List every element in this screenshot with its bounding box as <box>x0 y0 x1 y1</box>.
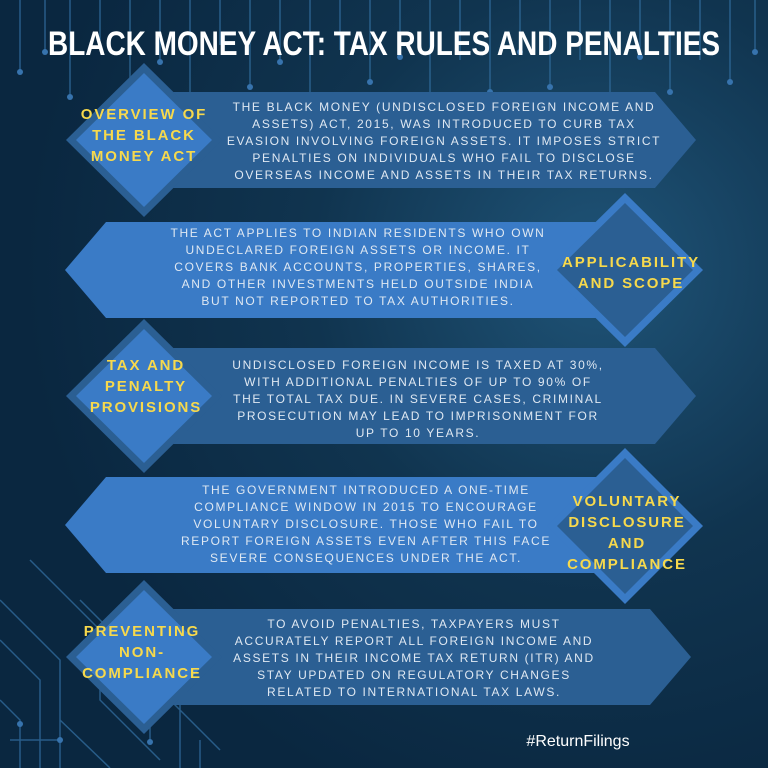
text: applicability: UNDECLARED FOREIGN ASSETS OR INCOME. IT <box>185 243 531 257</box>
label: voluntary: COMPLIANCE <box>567 556 687 573</box>
label: tax: TAX AND <box>107 357 185 374</box>
label: voluntary: DISCLOSURE <box>568 514 686 531</box>
text: applicability: BUT NOT REPORTED TO TAX AUTHORITIES. <box>201 294 515 308</box>
text: voluntary: REPORT FOREIGN ASSETS EVEN AFTER THIS FACE <box>181 534 551 548</box>
text: voluntary: COMPLIANCE WINDOW IN 2015 TO ENCOURAGE <box>194 500 538 514</box>
panel: applicability <box>65 193 703 347</box>
label: applicability: APPLICABILITY <box>562 254 700 271</box>
label: preventing: NON- <box>119 644 165 661</box>
text: applicability: AND OTHER INVESTMENTS HELD OUTSIDE INDIA <box>182 277 534 291</box>
panel: preventing non-compliance <box>66 580 691 734</box>
text: applicability: COVERS BANK ACCOUNTS, PROPERTIES, SHARES, <box>174 260 542 274</box>
text: tax: WITH ADDITIONAL PENALTIES OF UP TO 90% OF <box>244 375 592 389</box>
text: tax: UNDISCLOSED FOREIGN INCOME IS TAXED AT 30%, <box>232 358 604 372</box>
label: tax: PROVISIONS <box>90 399 202 416</box>
label: voluntary: VOLUNTARY <box>573 493 681 510</box>
label: preventing: COMPLIANCE <box>82 665 202 682</box>
hashtag: #ReturnFilings <box>526 733 630 750</box>
text: overview: EVASION INVOLVING FOREIGN ASSETS. IT IMPOSES STRICT <box>227 134 661 148</box>
text: preventing: ACCURATELY REPORT ALL FOREIGN INCOME AND <box>235 634 593 648</box>
panel: tax and penalty <box>66 319 696 473</box>
panel: overview <box>66 63 696 217</box>
text: overview: OVERSEAS INCOME AND ASSETS IN THEIR TAX RETURNS. <box>234 168 654 182</box>
text: applicability: THE ACT APPLIES TO INDIAN RESIDENTS WHO OWN <box>170 226 546 240</box>
text: preventing: RELATED TO INTERNATIONAL TAX LAWS. <box>267 685 561 699</box>
label: applicability: AND SCOPE <box>578 275 684 292</box>
panel: voluntary disclosure <box>65 448 703 604</box>
text: tax: PROSECUTION MAY LEAD TO IMPRISONMENT FOR <box>237 409 599 423</box>
text: overview: PENALTIES ON INDIVIDUALS WHO FAIL TO DISCLOSE <box>252 151 636 165</box>
text: voluntary: THE GOVERNMENT INTRODUCED A ONE-TIME <box>202 483 530 497</box>
label: overview: OVERVIEW OF <box>81 106 207 123</box>
label: preventing: PREVENTING <box>84 623 200 640</box>
text: tax: UP TO 10 YEARS. <box>356 426 480 440</box>
text: overview: THE BLACK MONEY (UNDISCLOSED FOREIGN INCOME AND <box>233 100 655 114</box>
text: voluntary: SEVERE CONSEQUENCES UNDER THE ACT. <box>210 551 522 565</box>
label: overview: MONEY ACT <box>91 148 197 165</box>
text: overview: ASSETS) ACT, 2015, WAS INTRODUCED TO CURB TAX <box>252 117 636 131</box>
text: voluntary: VOLUNTARY DISCLOSURE. THOSE WHO FAIL TO <box>193 517 539 531</box>
text: preventing: ASSETS IN THEIR INCOME TAX RETURN (ITR) AND <box>233 651 595 665</box>
text: preventing: STAY UPDATED ON REGULATORY CHANGES <box>257 668 571 682</box>
label: overview: THE BLACK <box>92 127 196 144</box>
text: preventing: TO AVOID PENALTIES, TAXPAYERS MUST <box>267 617 561 631</box>
label: voluntary: AND <box>608 535 646 552</box>
text: tax: THE TOTAL TAX DUE. IN SEVERE CASES, CRIMINAL <box>233 392 603 406</box>
label: tax: PENALTY <box>105 378 187 395</box>
